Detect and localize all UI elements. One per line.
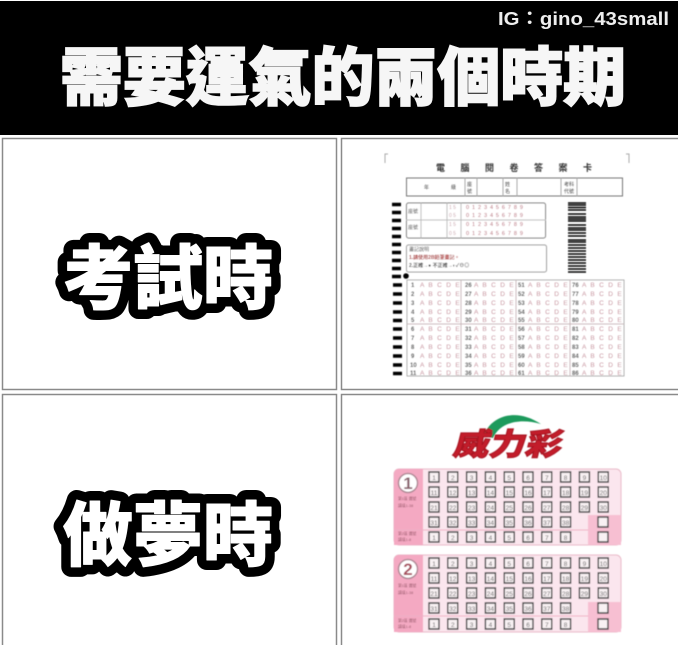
lottery grid 2: 33 — [468, 606, 476, 613]
lottery grid 2: 23 — [468, 591, 476, 598]
lottery grid 2: 32 — [449, 606, 457, 613]
lottery grid 1: 36 — [524, 520, 532, 527]
lottery grid 2: 24 — [487, 591, 494, 598]
answer grid: A B C D E — [474, 282, 514, 289]
answer grid: 59 — [518, 354, 525, 360]
section notes: 第2區 選號 — [398, 618, 417, 623]
answer grid: 4 — [411, 310, 415, 316]
candidate info box: 名 — [505, 188, 510, 195]
lottery grid 2: 2 — [403, 560, 413, 579]
answer grid: 77 — [572, 292, 579, 298]
lottery grid 2: 34 — [487, 606, 494, 613]
answer grid: A B C D E — [474, 362, 514, 369]
answer grid: 11 — [410, 371, 417, 377]
answer grid: 2 — [411, 292, 415, 298]
seat number grid: 座號 — [408, 224, 418, 231]
lottery grid 2: 12 — [449, 576, 457, 583]
answer grid: A B C D E — [528, 317, 568, 324]
lottery grid 2: 37 — [543, 606, 551, 613]
number badge 1 — [398, 474, 418, 492]
answer grid: 78 — [572, 301, 579, 307]
lottery grid 2: 1 — [432, 561, 436, 568]
seat number grid: 0 5 — [449, 213, 456, 219]
lottery grid 2: 4 — [489, 561, 493, 568]
answer grid: 10 — [410, 363, 417, 369]
lottery grid 1: 29 — [581, 505, 588, 512]
lottery grid 2: 38 — [562, 606, 570, 613]
lottery grid 2: 31 — [430, 606, 438, 613]
answer grid: A B C D E — [582, 362, 622, 369]
lottery grid 1: 6 — [526, 535, 530, 542]
lottery grid 1: 32 — [449, 520, 457, 527]
panel: exam label — [2, 138, 336, 390]
answer grid: A B C D E — [582, 353, 622, 360]
lottery grid 2 — [394, 555, 621, 632]
lottery grid 1: 2 — [451, 475, 455, 482]
answer grid: 6 — [411, 327, 415, 333]
title banner — [0, 1, 678, 135]
lottery grid 2: 28 — [562, 591, 570, 598]
seat number grid: 0 5 — [449, 231, 456, 237]
lottery grid 1: 1 — [432, 475, 436, 482]
lottery grid 2: 15 — [506, 576, 513, 583]
answer grid: 28 — [465, 301, 472, 307]
lottery grid 1: 3 — [470, 535, 474, 542]
answer grid: 29 — [465, 310, 472, 316]
lottery grid 1: 9 — [583, 475, 587, 482]
answer grid: 55 — [518, 318, 525, 324]
lottery grid 1: 23 — [468, 505, 476, 512]
section notes: 請填1-8 — [398, 537, 411, 542]
candidate info box: 代號 — [564, 188, 574, 195]
candidate info box: 座 — [467, 181, 472, 188]
answer grid — [407, 280, 624, 377]
answer grid: A B C D E — [474, 344, 514, 351]
seat number grid: 座號 — [408, 208, 418, 215]
candidate info box: 考科 — [564, 181, 574, 188]
lottery grid 1: 4 — [489, 475, 493, 482]
lottery grid 2: 4 — [489, 622, 493, 629]
section notes — [398, 583, 417, 629]
lottery grid 2: 8 — [564, 561, 568, 568]
section notes: 第1區 選號 — [398, 496, 417, 501]
lottery grid 1: 35 — [506, 520, 513, 527]
lottery grid 2: 1 — [432, 622, 436, 629]
candidate info box — [406, 178, 622, 196]
lottery grid 2: 19 — [581, 576, 588, 583]
lottery grid 1: 4 — [489, 535, 493, 542]
answer grid: A B C D E — [582, 370, 622, 377]
lottery grid 2: 21 — [430, 591, 438, 598]
answer grid: A B C D E — [420, 282, 460, 289]
lottery grid 2: 36 — [524, 606, 532, 613]
lottery grid 2: 29 — [581, 591, 588, 598]
answer grid: 79 — [572, 310, 579, 316]
answer grid: 56 — [518, 327, 525, 333]
answer sheet title: 電 腦 閱 卷 答 案 卡 — [436, 162, 592, 173]
answer grid: 32 — [465, 336, 472, 342]
lottery grid 2: 2 — [451, 622, 455, 629]
answer grid: 36 — [465, 371, 472, 377]
lottery grid 2: 2 — [451, 561, 455, 568]
candidate info box: 姓 — [505, 181, 510, 188]
answer grid: 33 — [465, 345, 472, 351]
answer grid: 83 — [572, 345, 579, 351]
answer grid: A B C D E — [528, 344, 568, 351]
answer grid: A B C D E — [420, 317, 460, 324]
lottery grid 2: 3 — [470, 561, 474, 568]
answer grid: 26 — [465, 283, 472, 289]
lottery grid 2: 9 — [583, 561, 587, 568]
lottery grid 2: 13 — [468, 576, 476, 583]
lottery grid 1: 27 — [543, 505, 551, 512]
lottery grid 1: 15 — [506, 490, 513, 497]
lottery grid 2: 35 — [506, 606, 513, 613]
seat number grid: 1 5 — [449, 222, 456, 228]
lottery grid 1: 14 — [487, 490, 494, 497]
lottery grid 2: 11 — [431, 576, 438, 583]
answer grid: A B C D E — [528, 362, 568, 369]
answer grid: A B C D E — [420, 300, 460, 307]
answer grid: 76 — [572, 283, 579, 289]
candidate info box: 年 — [424, 184, 429, 191]
lottery grid 1: 31 — [430, 520, 438, 527]
lottery grid 1: 8 — [564, 535, 568, 542]
lottery grid 2: 17 — [543, 576, 551, 583]
answer grid: A B C D E — [582, 300, 622, 307]
heading: dream time: 做夢時 — [63, 480, 273, 581]
answer grid: 27 — [465, 292, 472, 298]
seat number grid: 0 1 2 3 4 5 6 7 8 9 — [466, 231, 523, 237]
timing marks — [392, 204, 402, 374]
answer grid: 1 — [411, 283, 415, 289]
lottery grid 1: 25 — [506, 505, 513, 512]
lottery grid 2: 5 — [507, 561, 511, 568]
lottery grid 1: 3 — [470, 475, 474, 482]
section notes: 請填1-38 — [398, 503, 413, 508]
answer grid: A B C D E — [582, 282, 622, 289]
answer grid: A B C D E — [528, 309, 568, 316]
lottery grid 1: 18 — [562, 490, 570, 497]
heading: dream time: 做夢時 — [63, 480, 273, 581]
lottery grid 2: 16 — [524, 576, 532, 583]
lottery grid 2: 20 — [600, 576, 607, 583]
answer grid: 30 — [465, 318, 472, 324]
answer grid: 52 — [518, 292, 525, 298]
lottery grid 1: 10 — [600, 475, 607, 482]
lottery grid 2: 18 — [562, 576, 570, 583]
answer grid: A B C D E — [582, 344, 622, 351]
seat number grid: 1 5 — [449, 205, 456, 211]
lottery grid 1 — [394, 469, 621, 545]
answer grid: A B C D E — [420, 370, 460, 377]
section notes: 第1區 選號 — [398, 583, 417, 588]
answer grid: 8 — [411, 345, 415, 351]
lottery grid 1: 1 — [403, 474, 413, 493]
answer grid: 31 — [465, 327, 472, 333]
answer grid: A B C D E — [474, 300, 514, 307]
answer grid: A B C D E — [474, 326, 514, 333]
lottery logo: 威力彩 — [450, 420, 569, 464]
answer grid: 3 — [411, 301, 415, 307]
instructions box: 1.請使用2B鉛筆畫記。 — [409, 254, 460, 261]
answer grid: 34 — [465, 354, 472, 360]
answer grid: A B C D E — [474, 370, 514, 377]
answer grid: 60 — [518, 363, 525, 369]
section notes: 請填1-38 — [398, 590, 413, 595]
panel: answer sheet — [342, 138, 678, 390]
seat number grid: 0 1 2 3 4 5 6 7 8 9 — [466, 213, 523, 219]
lottery grid 1: 38 — [562, 520, 570, 527]
lottery grid 1: 16 — [524, 490, 532, 497]
answer grid: 9 — [411, 354, 415, 360]
panel: lottery slip — [342, 394, 678, 645]
answer grid: A B C D E — [582, 326, 622, 333]
lottery grid 1: 34 — [487, 520, 494, 527]
lottery grid 2: 6 — [526, 622, 530, 629]
answer grid: A B C D E — [474, 309, 514, 316]
answer grid: A B C D E — [528, 300, 568, 307]
lottery grid 1: 2 — [451, 535, 455, 542]
candidate info box: 級 — [451, 184, 456, 191]
lottery grid 1: 28 — [562, 505, 570, 512]
lottery grid 1: 8 — [564, 475, 568, 482]
lottery grid 2: 22 — [449, 591, 457, 598]
lottery grid 1: 24 — [487, 505, 494, 512]
answer grid: 85 — [572, 363, 579, 369]
instructions box: 畫記說明 — [409, 246, 429, 253]
lottery grid 1: 30 — [600, 505, 607, 512]
lottery grid 1: 17 — [543, 490, 551, 497]
lottery grid 1: 20 — [600, 490, 607, 497]
lottery grid 1: 13 — [468, 490, 476, 497]
lottery grid 2: 8 — [564, 622, 568, 629]
lottery grid 1: 12 — [449, 490, 457, 497]
answer grid: A B C D E — [528, 282, 568, 289]
answer grid: A B C D E — [582, 309, 622, 316]
lottery grid 1: 6 — [526, 475, 530, 482]
answer grid: A B C D E — [582, 291, 622, 298]
section notes: 第2區 選號 — [398, 531, 417, 536]
number badge 2 — [398, 560, 418, 578]
instructions box: 2.正確→● 不正確→◐✓⊖◎ — [409, 262, 469, 269]
heading: exam time: 考試時 — [63, 223, 273, 324]
answer grid: A B C D E — [528, 335, 568, 342]
barcode — [568, 203, 586, 272]
watermark: IG：gino_43small — [498, 8, 669, 29]
lottery grid 1: 11 — [431, 490, 438, 497]
section notes — [398, 496, 417, 542]
answer grid: 80 — [572, 318, 579, 324]
lottery grid 1: 22 — [449, 505, 457, 512]
lottery grid 1: 5 — [507, 475, 511, 482]
lottery grid 2: 7 — [545, 561, 549, 568]
lottery grid 2: 3 — [470, 622, 474, 629]
seat number grid: 0 1 2 3 4 5 6 7 8 9 — [466, 205, 523, 211]
lottery grid 2: 25 — [506, 591, 513, 598]
answer grid: A B C D E — [528, 291, 568, 298]
section notes: 請填1-8 — [398, 624, 411, 629]
answer grid: 57 — [518, 336, 525, 342]
lottery grid 1: 5 — [507, 535, 511, 542]
lottery grid 2: 10 — [600, 561, 607, 568]
lottery grid 1: 7 — [545, 535, 549, 542]
answer grid: A B C D E — [474, 353, 514, 360]
candidate info box: 號 — [467, 188, 472, 195]
answer grid: A B C D E — [420, 309, 460, 316]
answer grid: A B C D E — [420, 291, 460, 298]
answer grid: 81 — [572, 327, 579, 333]
answer grid: A B C D E — [582, 335, 622, 342]
lottery grid 1: 33 — [468, 520, 476, 527]
answer grid: 5 — [411, 318, 415, 324]
answer grid: A B C D E — [528, 370, 568, 377]
heading: exam time: 考試時 — [63, 223, 273, 324]
answer grid: 58 — [518, 345, 525, 351]
lottery grid 1: 21 — [430, 505, 438, 512]
lottery grid 2: 26 — [524, 591, 532, 598]
lottery grid 1: 37 — [543, 520, 551, 527]
answer grid: 86 — [572, 371, 579, 377]
answer grid: A B C D E — [474, 291, 514, 298]
answer grid: A B C D E — [420, 353, 460, 360]
answer grid: 54 — [518, 310, 525, 316]
lottery grid 1: 7 — [545, 475, 549, 482]
lottery grid 2: 14 — [487, 576, 494, 583]
answer grid: 51 — [518, 283, 525, 289]
lottery grid 2: 6 — [526, 561, 530, 568]
seat number grid: 0 1 2 3 4 5 6 7 8 9 — [466, 222, 523, 228]
seat number grid — [406, 203, 546, 238]
answer grid: 7 — [411, 336, 415, 342]
lottery grid 2: 7 — [545, 622, 549, 629]
answer grid: 35 — [465, 363, 472, 369]
answer grid: A B C D E — [474, 317, 514, 324]
lottery grid 1: 26 — [524, 505, 532, 512]
answer grid: A B C D E — [582, 317, 622, 324]
answer grid: A B C D E — [528, 353, 568, 360]
answer grid: A B C D E — [420, 344, 460, 351]
lottery grid 1: 1 — [432, 535, 436, 542]
answer grid: 61 — [518, 371, 525, 377]
answer grid: A B C D E — [528, 326, 568, 333]
instructions box — [406, 245, 546, 272]
lottery grid 1: 19 — [581, 490, 588, 497]
answer grid: A B C D E — [420, 335, 460, 342]
answer grid: 82 — [572, 336, 579, 342]
answer grid: A B C D E — [420, 326, 460, 333]
answer grid: A B C D E — [474, 335, 514, 342]
lottery grid 2: 5 — [507, 622, 511, 629]
panel: dream label — [2, 394, 336, 645]
lottery grid 2: 30 — [600, 591, 607, 598]
lottery grid 2: 27 — [543, 591, 551, 598]
answer grid: 84 — [572, 354, 579, 360]
answer grid: A B C D E — [420, 362, 460, 369]
answer grid: 53 — [518, 301, 525, 307]
